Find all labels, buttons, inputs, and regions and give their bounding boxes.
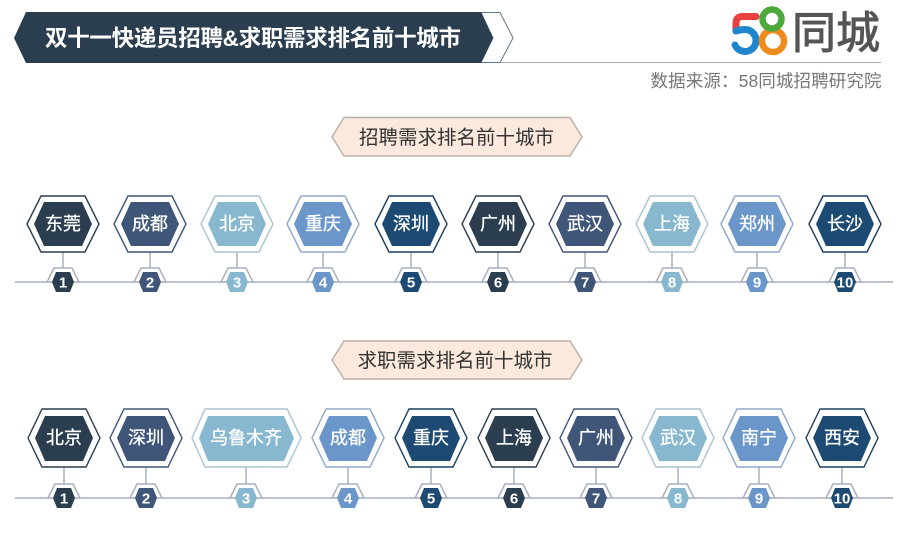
city: 乌鲁木齐 rank 3: 乌鲁木齐	[210, 428, 282, 448]
city: 北京 rank 3	[201, 196, 273, 292]
city: 北京 rank 1: 1	[60, 490, 68, 508]
city: 武汉 rank 7	[549, 196, 621, 292]
city: 北京 rank 3: 3	[233, 274, 241, 292]
city: 上海 rank 6: 上海	[496, 428, 532, 448]
city: 深圳 rank 5	[375, 196, 447, 292]
city: 广州 rank 6	[462, 196, 534, 292]
city: 东莞 rank 1	[27, 196, 99, 292]
city: 成都 rank 2: 成都	[132, 214, 168, 234]
city: 北京 rank 1	[28, 409, 100, 508]
city: 东莞 rank 1: 1	[59, 274, 67, 292]
city: 乌鲁木齐 rank 3	[192, 409, 301, 508]
city: 深圳 rank 5: 深圳	[393, 214, 429, 234]
city: 长沙 rank 10: 长沙	[827, 214, 863, 234]
title banner: 双十一快递员招聘&求职需求排名前十城市	[45, 25, 461, 51]
city: 重庆 rank 5: 重庆	[413, 428, 449, 448]
city: 重庆 rank 4: 4	[319, 274, 328, 292]
city: 长沙 rank 10: 10	[837, 274, 853, 292]
city: 成都 rank 2	[114, 196, 186, 292]
data source: 数据来源：58同城招聘研究院	[650, 71, 882, 91]
city: 西安 rank 10: 西安	[824, 428, 860, 448]
heading: recruitment ranking: 招聘需求排名前十城市	[359, 127, 554, 149]
city: 武汉 rank 8: 武汉	[660, 428, 696, 448]
city: 广州 rank 7	[560, 409, 632, 508]
timeline: recruitment	[15, 281, 893, 283]
city: 上海 rank 6	[478, 409, 550, 508]
city: 南宁 rank 9: 南宁	[741, 428, 777, 448]
title banner	[14, 12, 513, 63]
city: 重庆 rank 5: 5	[427, 490, 435, 508]
city: 上海 rank 8: 上海	[654, 214, 690, 234]
city: 南宁 rank 9: 9	[755, 490, 763, 508]
city: 北京 rank 1: 北京	[46, 428, 82, 448]
city: 武汉 rank 7: 武汉	[567, 214, 603, 234]
heading: job seeking ranking	[332, 341, 582, 379]
city: 广州 rank 6: 6	[494, 274, 502, 292]
city: 郑州 rank 9: 9	[753, 274, 761, 292]
city: 上海 rank 8: 8	[668, 274, 676, 292]
logo: 58同城: 同城	[792, 9, 880, 58]
city: 上海 rank 6: 6	[510, 490, 518, 508]
city: 重庆 rank 4: 重庆	[305, 214, 341, 234]
logo: 58同城	[735, 9, 880, 58]
city: 深圳 rank 2	[110, 409, 182, 508]
city: 深圳 rank 2: 2	[142, 490, 150, 508]
city: 成都 rank 4	[312, 409, 384, 508]
city: 重庆 rank 4	[287, 196, 359, 292]
city: 郑州 rank 9: 郑州	[739, 214, 775, 234]
city: 武汉 rank 8	[642, 409, 714, 508]
timeline: job seeking	[15, 497, 893, 499]
city: 成都 rank 4: 成都	[330, 428, 366, 448]
city: 上海 rank 8	[636, 196, 708, 292]
city: 长沙 rank 10	[809, 196, 881, 292]
city: 乌鲁木齐 rank 3: 3	[242, 490, 250, 508]
city: 西安 rank 10: 10	[834, 490, 850, 508]
city: 深圳 rank 2: 深圳	[128, 428, 164, 448]
city: 南宁 rank 9	[723, 409, 795, 508]
city: 广州 rank 7: 广州	[578, 428, 614, 448]
heading: job seeking ranking: 求职需求排名前十城市	[357, 350, 553, 372]
heading: recruitment ranking	[332, 118, 582, 156]
city: 成都 rank 4: 4	[344, 490, 353, 508]
city: 武汉 rank 7: 7	[581, 274, 589, 292]
city: 武汉 rank 8: 8	[674, 490, 682, 508]
city: 深圳 rank 5: 5	[407, 274, 415, 292]
city: 广州 rank 6: 广州	[480, 214, 516, 234]
city: 成都 rank 2: 2	[146, 274, 154, 292]
city: 广州 rank 7: 7	[592, 490, 600, 508]
city: 东莞 rank 1: 东莞	[45, 214, 81, 234]
city: 重庆 rank 5	[395, 409, 467, 508]
city: 西安 rank 10	[806, 409, 878, 508]
city: 北京 rank 3: 北京	[219, 214, 255, 234]
city: 郑州 rank 9	[721, 196, 793, 292]
